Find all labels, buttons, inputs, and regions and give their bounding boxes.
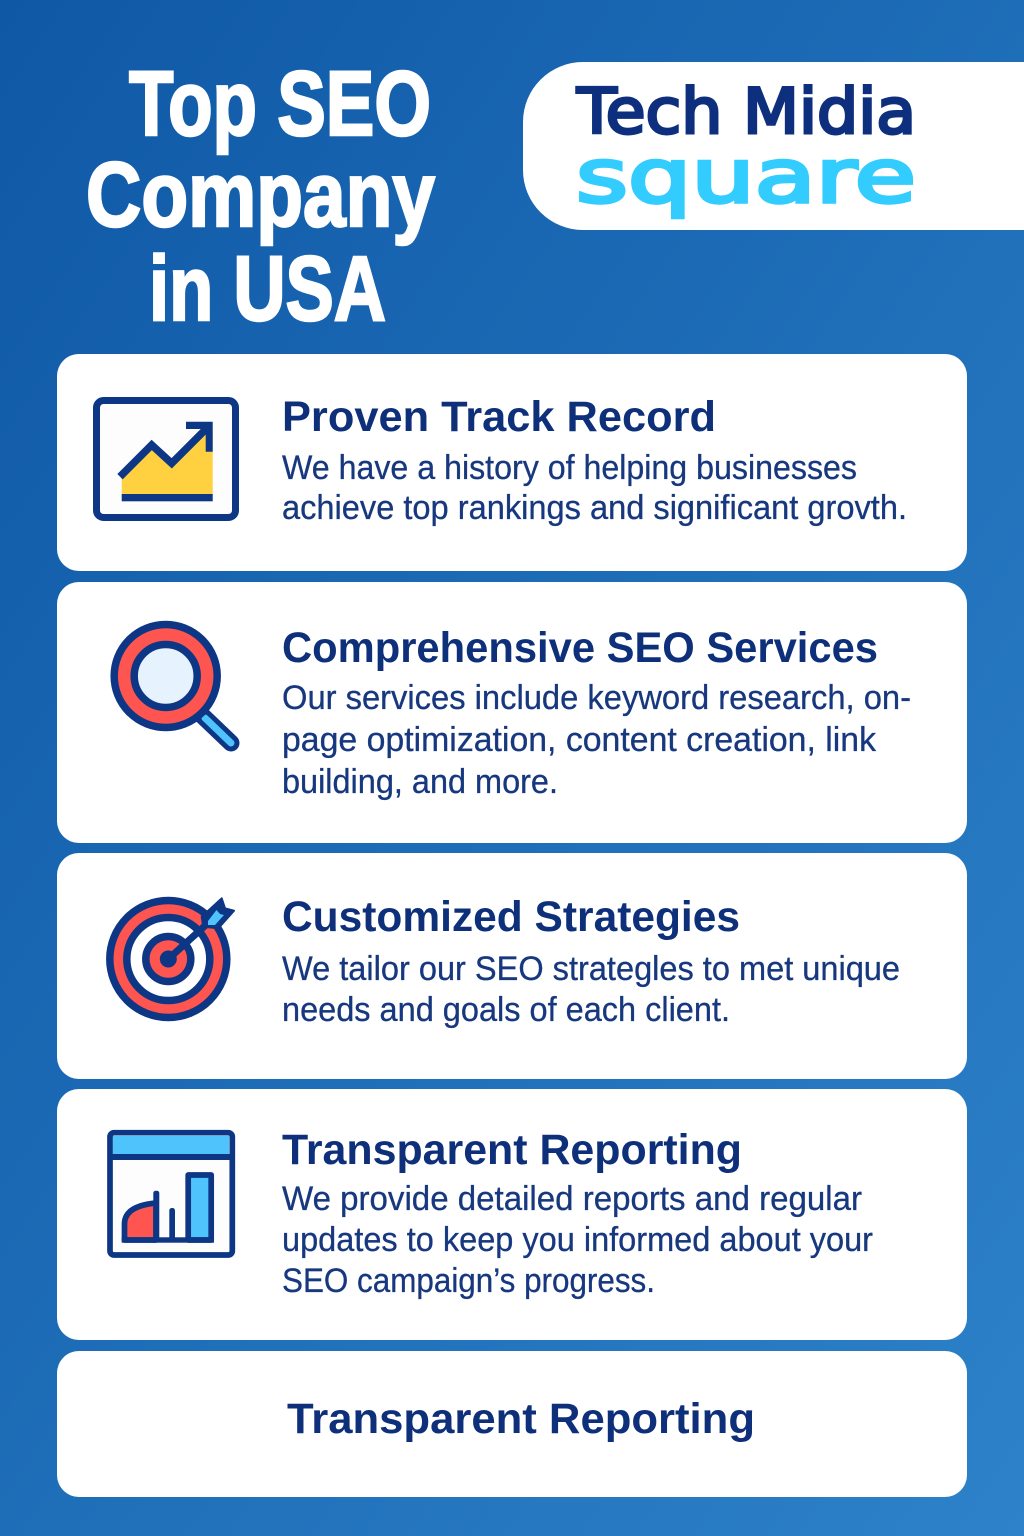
description <box>282 449 907 527</box>
title: Top SEO <box>129 53 431 155</box>
description: achieve top rankings and significant grovth. <box>282 489 907 527</box>
heading: Comprehensive SEO Services <box>282 624 878 672</box>
panel: proven track record <box>57 354 967 571</box>
description: building, and more. <box>282 763 558 801</box>
description: page optimization, content creation, link <box>282 721 877 759</box>
icon: magnifying glass <box>114 624 231 743</box>
description: We provide detailed reports and regular <box>282 1180 862 1218</box>
logo text: square: square <box>576 134 916 220</box>
logo panel <box>523 62 1024 230</box>
description: Our services include keyword research, on- <box>282 679 911 717</box>
heading: Transparent Reporting <box>282 1126 742 1174</box>
description <box>282 1180 873 1300</box>
panel: comprehensive seo services <box>57 582 967 843</box>
heading: Customized Strategies <box>282 893 740 941</box>
panel: bottom banner <box>57 1351 967 1497</box>
description <box>282 679 911 801</box>
icon: target with arrow <box>110 898 234 1018</box>
description: needs and goals of each client. <box>282 991 730 1029</box>
title <box>86 53 435 340</box>
panel: customized strategies <box>57 853 967 1079</box>
description <box>282 950 900 1029</box>
description: updates to keep you informed about your <box>282 1221 873 1259</box>
heading: Proven Track Record <box>282 393 716 441</box>
description: SEO campaign’s progress. <box>282 1262 655 1300</box>
description: We have a history of helping businesses <box>282 449 857 487</box>
title: in USA <box>149 238 386 340</box>
title: Company <box>86 144 435 246</box>
panel: transparent reporting <box>57 1089 967 1340</box>
banner heading: Transparent Reporting <box>287 1395 755 1443</box>
description: We tailor our SEO strategles to met unique <box>282 950 900 988</box>
icon: growth chart <box>96 400 236 518</box>
logo text: Tech Midia: Tech Midia <box>576 75 916 148</box>
icon: report window with bars <box>110 1133 232 1255</box>
